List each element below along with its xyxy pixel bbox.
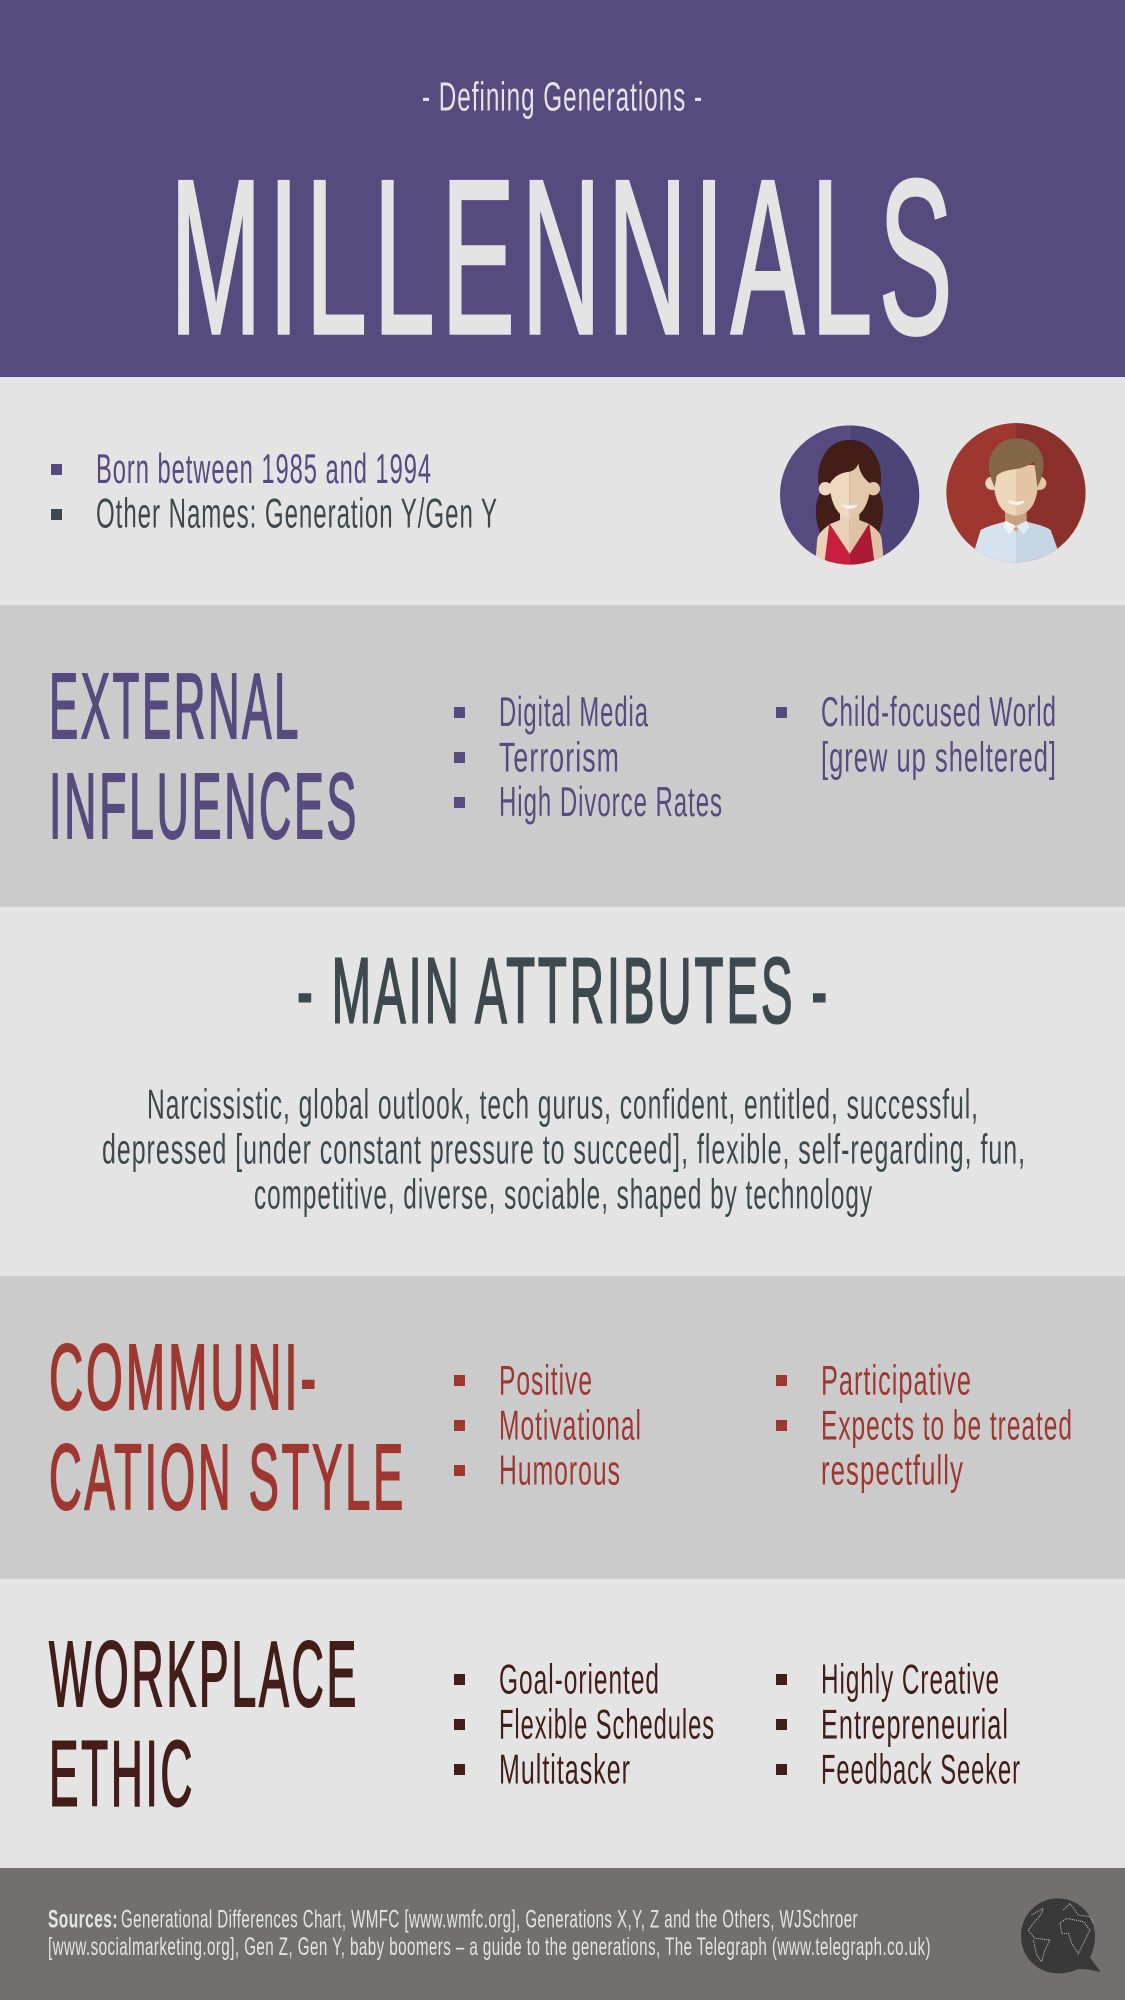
- bullet: born: Born between 1985 and 1994: [96, 445, 432, 492]
- sources text: Sources:: [48, 1907, 118, 1934]
- panel: birth years and names: [51, 423, 1086, 565]
- panel: external influences: INFLUENCES: [49, 754, 359, 858]
- panel: main attributes: [0, 907, 1125, 1276]
- panel: header: [0, 0, 1125, 380]
- list: workplace column two: Highly Creative: [821, 1656, 1000, 1703]
- list: influences column one: High Divorce Rates: [499, 778, 723, 825]
- bullet: other names: [51, 490, 498, 536]
- panel: communication style: [0, 1276, 1125, 1579]
- list: workplace column one: Flexible Schedules: [499, 1701, 715, 1748]
- panel: footer: [0, 1868, 1125, 2000]
- list: communication column two: respectfully: [821, 1447, 964, 1494]
- list: influences column one: Digital Media: [499, 688, 649, 735]
- list: communication column one: Humorous: [499, 1447, 621, 1494]
- list: workplace column one: [454, 1656, 715, 1793]
- list: communication column one: Motivational: [499, 1402, 642, 1449]
- bullet: other names: Other Names: Generation Y/Gen Y: [96, 490, 498, 536]
- list: influences column two: [776, 688, 1057, 780]
- sources text: [48, 1907, 931, 1961]
- list: workplace column two: [776, 1656, 1021, 1793]
- heading: external influences: EXTERNAL: [49, 654, 301, 758]
- attributes paragraph: [102, 1081, 1026, 1218]
- bullet: born: [51, 445, 432, 492]
- list: workplace column one: Multitasker: [499, 1746, 631, 1793]
- heading: external influences: [49, 654, 359, 858]
- icon: globe speech bubble: [1021, 1898, 1101, 1973]
- list: communication column two: [776, 1357, 1073, 1494]
- icon: woman avatar: [780, 425, 920, 567]
- list: workplace column one: Goal-oriented: [499, 1656, 660, 1703]
- subtitle: - Defining Generations -: [422, 74, 703, 120]
- list: influences column one: Terrorism: [499, 734, 620, 780]
- list: influences column one: [454, 688, 723, 825]
- list: workplace column two: Entrepreneurial: [821, 1701, 1009, 1748]
- heading: communication style: [49, 1325, 406, 1529]
- heading: workplace ethic: ETHIC: [49, 1722, 195, 1826]
- heading: communication style: COMMUNI-: [49, 1325, 319, 1429]
- panel: workplace ethic: [0, 1579, 1125, 1868]
- list: communication column two: Participative: [821, 1357, 972, 1404]
- icon: man avatar: [946, 423, 1086, 567]
- panel: external influences: [0, 605, 1125, 907]
- list: communication column one: [454, 1357, 642, 1494]
- list: communication column one: Positive: [499, 1357, 593, 1404]
- heading: workplace ethic: [49, 1622, 359, 1826]
- panel: workplace ethic: WORKPLACE: [49, 1622, 359, 1726]
- panel: communication style: CATION STYLE: [49, 1425, 406, 1529]
